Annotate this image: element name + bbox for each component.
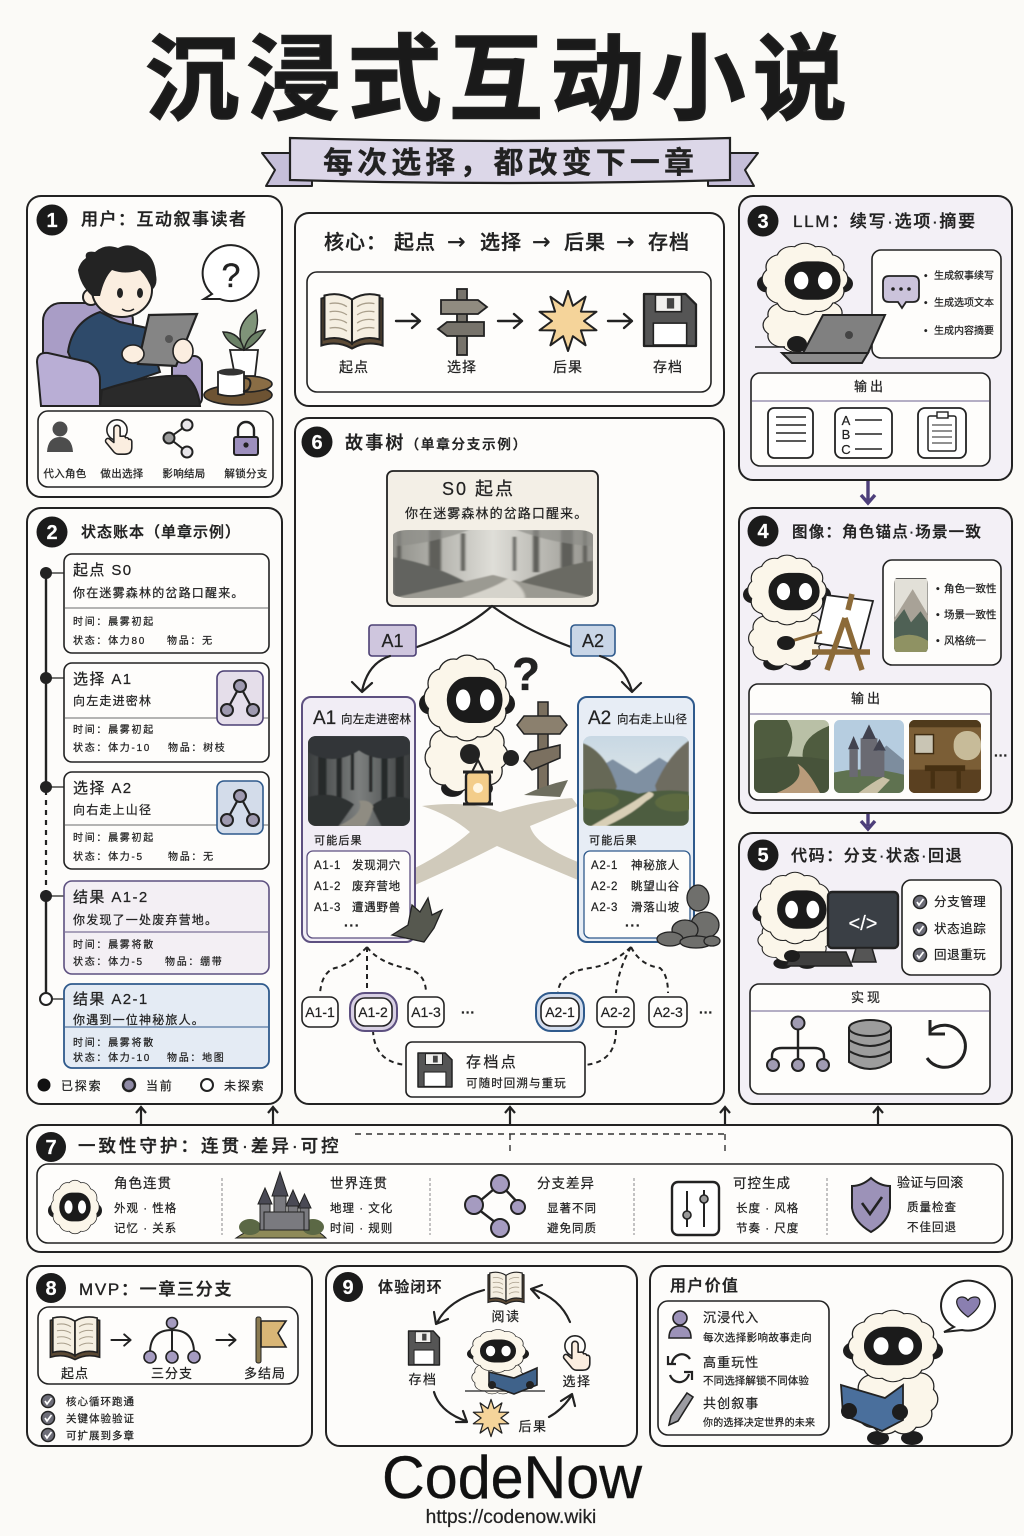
branch card A2: A2-3 [591,902,618,914]
badge 7: 7 [45,1137,57,1159]
badge 7 [36,1132,66,1162]
loop arrows [434,1285,575,1422]
panel 4: image [739,508,1012,813]
item: control: 可控生成 [733,1176,791,1191]
leaf nodes: A1-3 [411,1004,441,1020]
more images ellipsis: ··· [994,747,1008,763]
icon: text [768,408,813,458]
MVP checklist: 可扩展到多章 [66,1429,135,1442]
flow labels [339,359,683,375]
flow labels: 多结局 [244,1366,286,1381]
icon: read [488,1272,524,1304]
panel 5: code [739,833,1012,1104]
consistency list: 风格统一 [944,634,986,647]
heading 9: 体验闭环 [378,1278,443,1296]
legend: 当前 [146,1078,174,1093]
card A2-1: 状态：体力-10 [73,1053,151,1064]
icon: lock [234,422,258,455]
core flow box [307,272,711,392]
heading core: 存档 [648,231,690,254]
icon: clipboard [918,408,966,458]
item: control [733,1176,799,1235]
code features [902,880,1001,975]
mascot with lantern at signpost: ? [512,648,540,700]
feature labels: 影响结局 [162,467,206,480]
card A2: 物品：无 [168,850,215,863]
mascot reading [465,1330,545,1394]
badge 2: 2 [46,522,58,544]
branch label A1: A1 [381,631,404,651]
branch card A1: A1-2 [314,881,341,893]
item: branch diversity: 分支差异 [537,1176,595,1191]
implementation box [750,984,990,1094]
branch card A1: 向左走进密林 [341,712,411,726]
card A1 [64,663,269,762]
leaf nodes: ··· [461,1004,475,1020]
scene: tavern interior [909,720,981,793]
panel 2: state ledger [27,508,282,1104]
MVP checklist: 关键体验验证 [66,1412,135,1425]
heading 2: 状态账本（单章示例） [81,523,241,541]
icon: undo [927,1020,965,1067]
rocks [657,885,720,948]
flow labels: 起点 [61,1366,89,1381]
branch card A2: ··· [625,917,641,933]
heading core: 选择 [480,231,522,254]
panel: core loop [295,213,724,406]
icon: database [849,1020,891,1069]
heading core: 后果 [564,231,606,254]
MVP flow [38,1307,298,1384]
footer url: https://codenow.wiki [426,1507,596,1528]
panel 6: story tree [295,418,724,1104]
heading 1: 用户：互动叙事读者 [81,210,248,229]
card A1: 时间：晨雾初起 [73,723,155,736]
save point: 存档点 [466,1054,518,1071]
item: verify: 不佳回退 [907,1220,957,1234]
branch card A1: 遭遇野兽 [352,900,401,914]
heading 7: 一致性守护：连贯·差异·可控 [78,1136,342,1156]
icon: three branches [144,1318,200,1363]
item: character: 外观 · 性格 [114,1201,177,1215]
leaf nodes: A2-3 [653,1004,683,1020]
badge 2 [36,516,68,548]
icon: options: C [841,442,851,457]
card S0: 状态：体力80 [73,636,146,647]
card A1-2: 你发现了一处废弃营地。 [73,912,218,927]
icon: book [321,294,383,349]
output images: 输出 [851,691,883,706]
implementation box: 实现 [851,990,883,1005]
item: verify: 验证与回滚 [897,1175,964,1190]
generation list [872,250,1001,358]
branch card A1: 发现洞穴 [352,858,401,872]
title: 沉浸式互动小说 [145,27,854,132]
icon: person [47,422,73,452]
icon: options: A [842,413,851,428]
card S0: 你在迷雾森林的岔路口醒来。 [73,585,245,600]
scene thumbnail [894,578,928,652]
code features: 回退重玩 [934,947,986,962]
generation list: • [924,271,928,282]
subtitle ribbon [262,138,758,186]
heading core: 起点 [394,231,436,254]
card A2: 时间：晨雾初起 [73,831,155,844]
icon: replay [668,1354,692,1382]
scene: misty forest [393,530,593,598]
scene: mountain trail [583,736,689,826]
heading core: → [532,230,550,255]
card A1: 向左走进密林 [73,693,152,708]
dashed feedback bus [355,1134,725,1156]
branch card A2: A2-2 [591,881,618,893]
icon: book [50,1317,100,1360]
item: control: 长度 · 风格 [736,1201,799,1215]
value list: 共创叙事 [703,1396,759,1411]
icon: options [835,408,892,458]
branch card A2: A2 [588,708,611,729]
branch label A2: A2 [582,631,604,651]
feature labels: 代入角色 [43,467,87,480]
arrow [396,314,420,328]
branch card A1: ··· [344,917,360,933]
mascot with laptop [755,244,885,363]
MVP checklist [42,1394,135,1442]
branch lines from S0 [417,606,571,647]
card A2-1: 时间：晨雾将散 [73,1036,155,1049]
feature labels: 做出选择 [100,467,144,480]
generation list: • [924,326,928,337]
heading value: 用户价值 [670,1277,739,1295]
mascot at computer: </> [849,913,877,935]
heading 8: MVP：一章三分支 [79,1279,233,1299]
heading 4: 图像：角色锚点·场景一致 [792,523,982,541]
generation list: 生成叙事续写 [934,269,994,282]
icon: share [164,420,192,458]
card A2: 状态：体力-5 [73,852,144,863]
item: branch diversity: 显著不同 [547,1201,597,1215]
card A1-2: 结果 A1-2 [73,889,149,906]
code features: 分支管理 [934,894,986,909]
leaf nodes: A2-1 [545,1004,575,1020]
badge 6: 6 [311,432,323,454]
item: world: 世界连贯 [330,1176,388,1191]
panel 9: experience loop: 存档 [408,1372,438,1387]
branch card A1: A1 [313,708,336,729]
card A1: 物品：树枝 [168,741,226,754]
icon: sliders [672,1182,719,1235]
panel 3: LLM [739,196,1012,480]
illustration: reader in armchair [37,245,202,406]
heading 5: 代码：分支·状态·回退 [791,847,963,865]
dashed tree links [320,947,668,1065]
footer brand: CodeNow [382,1444,643,1511]
arrow [498,314,522,328]
card S0 [64,554,269,653]
branch card A2: A2-1 [591,860,618,872]
panel 9: experience loop: 后果 [518,1419,548,1434]
MVP checklist: 核心循环跑通 [66,1395,135,1408]
consistency list [883,560,1001,665]
item: character: 记忆 · 关系 [114,1221,177,1235]
branch card A1: 废弃营地 [352,879,401,893]
mascot at easel [743,556,873,670]
card A1-2: 物品：绷带 [165,955,224,968]
branch card A1: A1-1 [314,860,341,872]
card A1-2: 状态：体力-5 [73,957,144,968]
panel 9: experience loop: 选择 [562,1374,592,1389]
item: world: 地理 · 文化 [330,1201,393,1215]
card A2-1: 你遇到一位神秘旅人。 [73,1012,205,1027]
badge 1 [36,204,68,236]
panel 9: experience loop: 阅读 [491,1309,521,1324]
save point: 可随时回溯与重玩 [466,1076,567,1090]
feedback arrows into panel 7 [136,1107,883,1125]
generation list: • [924,298,928,309]
branch card A2: 神秘旅人 [631,858,680,872]
branch card A2: 可能后果 [589,833,638,847]
icon: castle [236,1172,326,1238]
item: character: 角色连贯 [114,1175,172,1191]
feature labels: 解锁分支 [224,467,268,480]
heading core: → [447,230,465,255]
consistency list: 角色一致性 [944,582,996,595]
icon: flag [256,1317,286,1363]
badge 8 [36,1273,66,1303]
badge 4 [748,516,778,546]
leaf nodes: A2-2 [601,1004,630,1020]
scene: dark forest [308,736,410,826]
badge 5 [748,840,778,870]
code features: 状态追踪 [934,921,986,936]
leaf nodes: A1-2 [358,1004,388,1020]
icon: outcome [473,1399,509,1437]
feature labels [43,467,268,480]
branch card A2: 眺望山谷 [631,880,680,893]
branch label A1 [369,625,416,656]
branch card A1: A1-3 [314,902,341,914]
value list: 不同选择解锁不同体验 [703,1374,809,1387]
badge 8: 8 [45,1278,57,1300]
output box [751,373,990,466]
arrow to A1 [352,656,390,692]
badge 6 [302,426,332,458]
item: world: 时间 · 规则 [330,1221,393,1235]
item: branch diversity: 避免同质 [547,1221,597,1235]
value list: 每次选择影响故事走向 [703,1331,812,1344]
icon: pencil [669,1393,693,1425]
icon: tree [767,1016,829,1071]
flow labels: 起点 [339,359,369,375]
arrow [216,1334,236,1346]
badge 4: 4 [757,521,769,543]
generation list: 生成内容摘要 [934,324,994,337]
legend: 已探索 [61,1079,102,1093]
speech bubble with question mark: ? [222,257,240,295]
icon: branching nodes [465,1175,525,1237]
save point [406,1042,585,1097]
arrow [608,314,632,328]
branch card A1: 可能后果 [314,833,363,847]
root node S0: S0 起点 [442,479,515,499]
guard row [37,1164,1003,1243]
item: branch diversity [537,1176,597,1235]
heading 6: 故事树（单章分支示例） [345,433,528,453]
panel 7: consistency guard [27,1125,1012,1252]
card A1: 状态：体力-10 [73,743,151,754]
panel: user value [650,1266,1012,1446]
heading 3: LLM：续写·选项·摘要 [793,212,977,231]
panel 1: user [27,196,282,497]
leaf nodes: A1-1 [305,1004,335,1020]
card A2 [64,772,269,869]
plant, table and mug [204,310,272,405]
branch card A2 [577,697,697,942]
card S0: 时间：晨雾初起 [73,615,155,628]
flow labels: 三分支 [151,1366,193,1381]
scene: castle [834,720,904,793]
card A1-2 [64,881,269,974]
heading core: → [616,230,634,255]
badge 3: 3 [757,211,769,233]
arrow 3 to 4 [861,481,875,503]
badge 3 [748,206,778,236]
card A2-1: 物品：地图 [167,1051,226,1064]
icon: person [669,1311,691,1338]
output images [749,684,991,800]
card A2-1: 结果 A2-1 [73,991,149,1008]
flow labels: 选择 [447,359,477,375]
consistency list: • [936,635,940,647]
output box: 输出 [854,379,886,394]
consistency list: • [936,609,940,621]
consistency list: 场景一致性 [944,608,996,621]
card A1-2: 时间：晨雾将散 [73,938,155,951]
subtitle ribbon: 每次选择，都改变下一章 [323,147,698,180]
speech bubble with question mark [203,245,259,301]
branch card A2: 向右走上山径 [617,712,687,726]
card A2: 向右走上山径 [73,802,152,817]
feature row [38,411,273,487]
branch card A2: 滑落山坡 [631,901,680,914]
road crossing [415,798,578,885]
timeline [40,567,64,1005]
heading core: 核心： [324,231,387,254]
arrow [111,1334,131,1346]
card S0: 物品：无 [167,634,214,647]
branch label A2 [571,625,615,656]
arrow to A2 [600,656,641,692]
root node S0 [387,471,598,606]
flow labels [61,1366,286,1381]
icon: tap [106,420,132,454]
legend: 未探索 [224,1079,265,1093]
icon: options: B [842,427,850,442]
icon: shield [852,1178,890,1232]
item: verify: 质量检查 [907,1200,957,1214]
card S0: 起点 S0 [73,562,133,579]
item: control: 节奏 · 尺度 [736,1221,799,1235]
value list: 高重玩性 [703,1355,759,1370]
badge 9: 9 [342,1277,354,1299]
mascot at computer [752,873,898,969]
icon: burst [540,291,596,351]
badge 5: 5 [757,845,769,867]
value list: 你的选择决定世界的未来 [703,1416,815,1429]
consistency list: • [936,583,940,595]
icon: mascot head [48,1181,102,1233]
root node S0: 你在迷雾森林的岔路口醒来。 [405,506,588,521]
flow labels: 存档 [653,359,683,375]
item: verify [897,1175,964,1234]
branch card A1 [302,697,415,942]
heart bubble [941,1281,995,1332]
leaf nodes [302,993,713,1031]
value list: 沉浸代入 [703,1310,759,1325]
scene: forest path [754,720,829,793]
mascot with lantern at signpost [419,648,568,804]
arrow 4 to 5 [861,814,875,829]
badge 1: 1 [46,210,58,232]
icon: floppy [644,294,696,346]
icon: signpost [438,289,487,355]
generation list: 生成选项文本 [934,296,994,309]
mascot with book [841,1311,943,1445]
card A1: 选择 A1 [73,671,133,688]
icon: save [408,1331,440,1365]
value list [658,1301,829,1435]
card A2-1 [64,984,269,1068]
legend [38,1078,265,1093]
leaf nodes: ··· [699,1004,713,1020]
panel 8: MVP [27,1266,312,1446]
badge 9 [333,1272,363,1302]
card A2: 选择 A2 [73,780,133,797]
panel 9: experience loop [326,1266,637,1446]
item: character [114,1175,177,1235]
icon: choose [564,1336,590,1370]
flow labels: 后果 [553,359,583,375]
item: world [330,1176,393,1235]
bush [392,898,442,942]
